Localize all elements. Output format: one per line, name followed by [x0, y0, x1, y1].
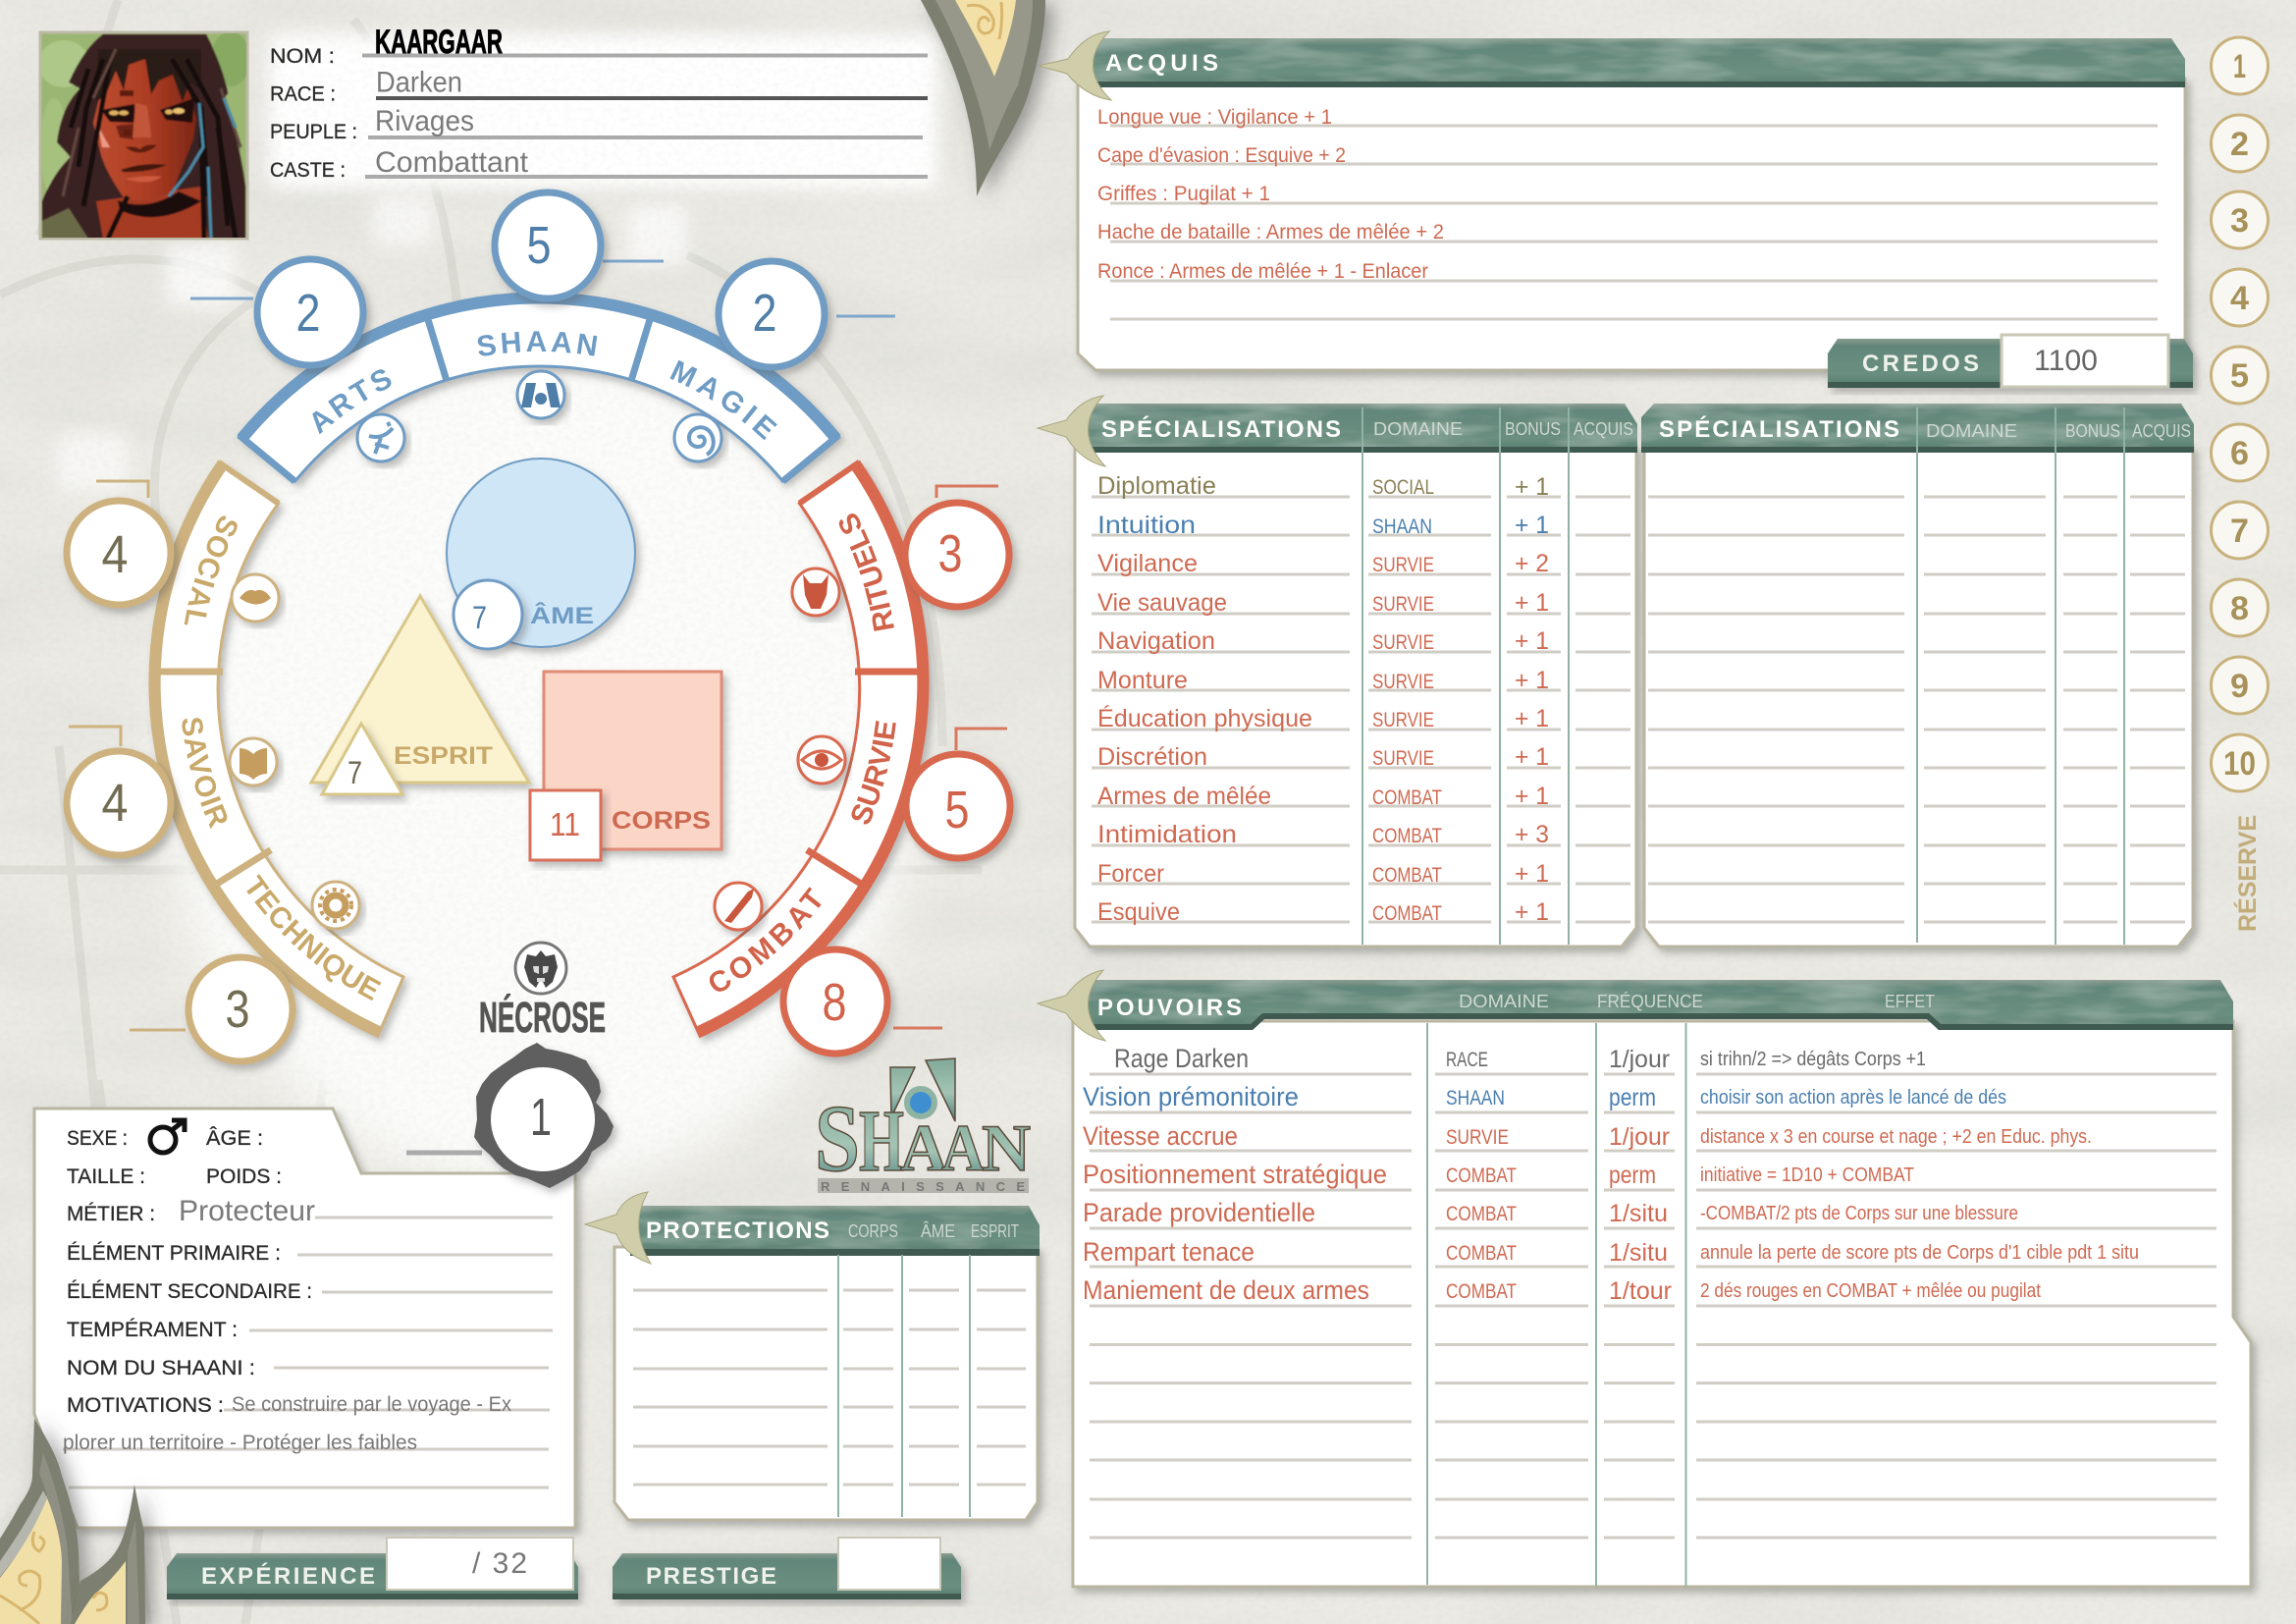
row: Armes de mêlée: + 1 [1515, 783, 1549, 810]
row: Vie sauvage: + 1 [1515, 589, 1549, 617]
row: Forcer: Forcer [1097, 860, 1164, 888]
row: Rage Darken [1114, 1044, 1926, 1073]
reserve tabs 1 to 10: 9 [2230, 668, 2249, 705]
box: credos [1828, 335, 2193, 388]
panel: identity: MOTIVATIONS : [67, 1394, 224, 1417]
panel: pouvoirs [1038, 970, 2251, 1587]
row: Maniement de deux armes: 1/tour [1609, 1277, 1672, 1305]
ring: tan arc (Social, Savoir, Technique): SOCIAL [185, 516, 238, 624]
panel: identity: Protecteur [179, 1195, 315, 1227]
row: Parade providentielle: COMBAT [1446, 1203, 1517, 1225]
row: Rage Darken: RACE [1446, 1049, 1488, 1071]
row: Vitesse accrue: Vitesse accrue [1083, 1121, 1238, 1151]
row: Rempart tenace [1083, 1237, 2139, 1267]
row: Diplomatie: SOCIAL [1372, 476, 1434, 499]
row: Maniement de deux armes: 2 dés rouges en COMBAT + mêlée ou pugilat [1700, 1280, 2041, 1302]
panel: protections: ESPRIT [971, 1221, 1019, 1241]
ornament: top blade [921, 0, 1045, 196]
row: Parade providentielle [1083, 1198, 2018, 1227]
panel: spécialisations left: SPÉCIALISATIONS [1101, 415, 1341, 443]
row: Armes de mêlée: Armes de mêlée [1097, 783, 1271, 810]
reserve tabs 1 to 10: 4 [2230, 280, 2249, 317]
identity fields: NOM : [270, 45, 335, 68]
panel: spécialisations left [1038, 396, 1637, 947]
identity fields [270, 24, 928, 182]
score circles: tan: 4 [102, 774, 128, 833]
attribute: Âme: ÂME [530, 602, 594, 629]
logo: Shaan Renaissance: N [982, 1110, 1031, 1185]
row: Monture [1097, 667, 1549, 694]
identity fields: RACE : [270, 82, 336, 106]
ring: red arc (Rituels, Survie, Combat): RITUELS [838, 514, 894, 631]
row: Diplomatie [1097, 472, 1549, 501]
box: prestige [613, 1538, 961, 1599]
box: expérience [167, 1538, 578, 1599]
row: Esquive [1097, 898, 1549, 926]
attribute: Esprit [311, 596, 529, 794]
reserve tabs 1 to 10: 2 [2230, 126, 2249, 163]
panel: pouvoirs: EFFET [1885, 992, 1935, 1011]
row: Maniement de deux armes: Maniement de deux armes [1083, 1275, 1369, 1305]
row: Intuition: SHAAN [1372, 515, 1432, 538]
small domain icons: blue [357, 371, 721, 461]
row: Positionnement stratégique [1083, 1160, 1914, 1189]
logo: Shaan Renaissance: A [900, 1110, 947, 1185]
attribute: Corps: CORPS [612, 807, 711, 835]
score circles: red: 5 [944, 781, 970, 839]
row: Armes de mêlée: COMBAT [1372, 786, 1442, 809]
row: Vigilance [1097, 550, 1549, 577]
row: Vigilance: SURVIE [1372, 554, 1434, 576]
row: Rempart tenace: 1/situ [1609, 1239, 1668, 1267]
row: Rempart tenace: Rempart tenace [1083, 1237, 1255, 1267]
attribute: Esprit: 7 [347, 755, 362, 790]
box: credos: 1100 [2034, 345, 2098, 377]
small domain icons: tan [230, 574, 359, 929]
score circles: red: 8 [823, 973, 846, 1032]
box: prestige: PRESTIGE [646, 1563, 776, 1590]
ring: blue arc (Arts, Shaan, Magie): MAGIE [669, 359, 777, 440]
panel: identity: Se construire par le voyage - Ex [232, 1393, 511, 1416]
icon: male symbol [150, 1120, 185, 1153]
row: Vitesse accrue [1083, 1121, 2092, 1151]
attribute: Âme: 7 [472, 600, 487, 635]
score circles: red [783, 503, 1010, 1054]
row: Vision prémonitoire: SHAAN [1446, 1087, 1505, 1110]
row: Intuition: + 1 [1515, 512, 1549, 539]
panel: spécialisations right: BONUS [2065, 421, 2120, 441]
row: Intuition: Intuition [1097, 512, 1196, 539]
row: Rempart tenace: COMBAT [1446, 1242, 1517, 1265]
logo: Shaan Renaissance: S [815, 1086, 860, 1192]
row: Navigation [1097, 627, 1549, 655]
ornament: bottom-left blades [0, 1419, 145, 1624]
row: Armes de mêlée [1097, 783, 1549, 810]
panel: identity [34, 1109, 575, 1528]
row: Esquive: COMBAT [1372, 902, 1442, 925]
row: Maniement de deux armes: COMBAT [1446, 1280, 1517, 1303]
identity fields: Combattant [375, 146, 529, 179]
row: Vitesse accrue: distance x 3 en course et nage ; +2 en Educ. phys. [1700, 1126, 2092, 1148]
heading: Nécrose: NÉCROSE [479, 993, 606, 1042]
row: Intuition [1097, 512, 1549, 539]
panel: spécialisations left: BONUS [1505, 419, 1561, 439]
small domain icons: red [715, 568, 845, 930]
identity fields: KAARGAAR [375, 24, 503, 61]
score circles: tan: 3 [226, 980, 249, 1039]
score circles: blue: 5 [526, 216, 552, 275]
row: Forcer: + 1 [1515, 860, 1549, 888]
row: Vision prémonitoire: perm [1609, 1084, 1656, 1111]
reserve tabs 1 to 10: 3 [2230, 202, 2249, 240]
panel: acquis: Griffes : Pugilat + 1 [1097, 183, 1270, 205]
reserve tabs 1 to 10: 10 [2223, 745, 2256, 783]
portrait [38, 31, 250, 239]
row: Discrétion: SURVIE [1372, 747, 1434, 770]
ring: tan arc (Social, Savoir, Technique) [148, 460, 412, 1045]
score circles: blue: 2 [752, 284, 777, 343]
row: Vitesse accrue: 1/jour [1609, 1123, 1670, 1151]
row: Rempart tenace: annule la perte de score pts de Corps d'1 cible pdt 1 situ [1700, 1242, 2139, 1264]
panel: spécialisations right: SPÉCIALISATIONS [1659, 415, 1899, 443]
reserve tabs 1 to 10: 1 [2233, 48, 2246, 85]
row: Éducation physique: Éducation physique [1097, 704, 1312, 732]
panel: spécialisations right [1641, 404, 2194, 947]
ring: red arc (Rituels, Survie, Combat): SURVIE [852, 721, 896, 825]
panel: pouvoirs: DOMAINE [1459, 992, 1549, 1011]
panel: protections [585, 1192, 1040, 1520]
ring: red arc (Rituels, Survie, Combat) [671, 460, 936, 1045]
ring: tan arc (Social, Savoir, Technique): TECHNIQUE [246, 874, 381, 1001]
row: Éducation physique: SURVIE [1372, 709, 1434, 731]
panel: acquis: Hache de bataille : Armes de mêlée + 2 [1097, 221, 1444, 244]
row: Parade providentielle: 1/situ [1609, 1200, 1668, 1227]
row: Parade providentielle: Parade providentielle [1083, 1198, 1315, 1227]
panel: identity: ÉLÉMENT PRIMAIRE : [67, 1242, 281, 1265]
row: Diplomatie: Diplomatie [1097, 472, 1216, 500]
reserve tabs 1 to 10: 8 [2230, 590, 2249, 627]
panel: protections: CORPS [848, 1221, 898, 1241]
reserve tabs 1 to 10: 5 [2230, 357, 2249, 395]
panel: identity: plorer un territoire - Protéger les faibles [63, 1432, 417, 1454]
row: Intimidation: COMBAT [1372, 825, 1442, 847]
row: Vitesse accrue: SURVIE [1446, 1126, 1509, 1149]
logo: Shaan Renaissance: A [941, 1110, 985, 1185]
logo: Shaan Renaissance [815, 1058, 1031, 1194]
identity fields: PEUPLE : [270, 121, 357, 143]
identity fields: Rivages [375, 105, 474, 137]
panel: identity: POIDS : [206, 1165, 282, 1188]
row: Positionnement stratégique: Positionnement stratégique [1083, 1160, 1387, 1189]
row: Monture: + 1 [1515, 667, 1549, 694]
panel: spécialisations right: ACQUIS [2132, 421, 2191, 441]
ring: blue arc (Arts, Shaan, Magie): ARTS [312, 369, 391, 434]
row: Monture: Monture [1097, 667, 1188, 694]
panel: acquis: ACQUIS [1105, 50, 1218, 77]
panel: identity: ÂGE : [206, 1127, 263, 1150]
panel: acquis: Cape d'évasion : Esquive + 2 [1097, 144, 1346, 167]
panel: spécialisations right: DOMAINE [1926, 421, 2017, 441]
logo: Shaan Renaissance: RENAISSANCE [821, 1179, 1025, 1194]
ring: blue arc (Arts, Shaan, Magie) [237, 293, 846, 491]
row: Positionnement stratégique: COMBAT [1446, 1164, 1517, 1187]
reserve tabs 1 to 10: 7 [2230, 513, 2249, 550]
panel: acquis: Ronce : Armes de mêlée + 1 - Enlacer [1097, 260, 1428, 283]
row: Esquive: + 1 [1515, 898, 1549, 926]
reserve tabs 1 to 10 [2211, 37, 2268, 791]
row: Parade providentielle: -COMBAT/2 pts de Corps sur une blessure [1700, 1203, 2018, 1224]
row: Vision prémonitoire: Vision prémonitoire [1083, 1082, 1299, 1111]
panel: identity: TAILLE : [67, 1165, 145, 1188]
Nécrose score [474, 1043, 614, 1188]
row: Forcer [1097, 860, 1549, 888]
row: Navigation: SURVIE [1372, 631, 1434, 654]
panel: acquis [1039, 31, 2185, 370]
icon: Nécrose [515, 943, 566, 994]
attribute: Âme [447, 459, 635, 649]
row: Intimidation [1097, 821, 1549, 848]
attribute: Corps: 11 [550, 806, 580, 842]
row: Éducation physique [1097, 704, 1549, 732]
score circles: tan [67, 501, 293, 1061]
ring: blue arc (Arts, Shaan, Magie): SHAAN [477, 331, 597, 356]
score circles: red: 3 [938, 524, 962, 583]
reserve tabs 1 to 10: 6 [2230, 435, 2249, 472]
row: Maniement de deux armes [1083, 1275, 2041, 1305]
ring: tan arc (Social, Savoir, Technique): SAVOIR [182, 718, 228, 829]
row: Intimidation: Intimidation [1097, 821, 1237, 848]
row: Monture: SURVIE [1372, 671, 1434, 693]
row: Vigilance: Vigilance [1097, 550, 1198, 577]
row: Vigilance: + 2 [1515, 550, 1549, 577]
panel: protections: PROTECTIONS [646, 1218, 829, 1244]
logo: Shaan Renaissance: H [859, 1093, 904, 1190]
identity fields: CASTE : [270, 159, 346, 182]
attribute: Corps [530, 672, 721, 860]
panel: pouvoirs: FRÉQUENCE [1597, 992, 1703, 1011]
row: Rage Darken: Rage Darken [1114, 1044, 1249, 1073]
row: Positionnement stratégique: perm [1609, 1162, 1656, 1189]
row: Positionnement stratégique: initiative = 1D10 + COMBAT [1700, 1164, 1914, 1186]
panel: pouvoirs: POUVOIRS [1097, 995, 1242, 1021]
row: Discrétion: Discrétion [1097, 743, 1207, 771]
label: réserve: RÉSERVE [2233, 815, 2262, 932]
panel: acquis: Longue vue : Vigilance + 1 [1097, 106, 1332, 129]
row: Vie sauvage [1097, 589, 1549, 617]
row: Discrétion [1097, 743, 1549, 771]
connector lines [69, 261, 1007, 1153]
score circles: blue [257, 192, 825, 367]
row: Vision prémonitoire [1083, 1082, 2006, 1111]
panel: protections: ÂME [921, 1221, 955, 1241]
box: expérience: EXPÉRIENCE [201, 1562, 375, 1590]
box: credos: CREDOS [1862, 351, 1979, 377]
row: Discrétion: + 1 [1515, 743, 1549, 771]
row: Diplomatie: + 1 [1515, 473, 1549, 501]
panel: identity: SEXE : [67, 1127, 128, 1150]
row: Esquive: Esquive [1097, 898, 1180, 926]
row: Vie sauvage: Vie sauvage [1097, 589, 1227, 617]
panel: identity: NOM DU SHAANI : [67, 1357, 255, 1380]
panel: identity: TEMPÉRAMENT : [67, 1319, 238, 1341]
panel: spécialisations left: DOMAINE [1373, 419, 1463, 439]
row: Vie sauvage: SURVIE [1372, 593, 1434, 616]
Nécrose score: 1 [530, 1088, 552, 1147]
row: Rage Darken: si trihn/2 => dégâts Corps +1 [1700, 1049, 1926, 1070]
row: Éducation physique: + 1 [1515, 705, 1549, 732]
ring: red arc (Rituels, Survie, Combat): COMBAT [709, 887, 822, 992]
score circles: blue: 2 [296, 284, 320, 343]
panel: identity: MÉTIER : [67, 1203, 155, 1225]
row: Rage Darken: 1/jour [1609, 1046, 1670, 1073]
box: expérience: / 32 [472, 1547, 527, 1580]
panel: identity: ÉLÉMENT SECONDAIRE : [67, 1280, 312, 1303]
panel: spécialisations left: ACQUIS [1574, 419, 1633, 439]
score circles: tan: 4 [102, 525, 128, 584]
row: Intimidation: + 3 [1515, 821, 1549, 848]
row: Forcer: COMBAT [1372, 864, 1442, 887]
identity fields: Darken [376, 67, 462, 98]
attribute: Esprit: ESPRIT [394, 742, 493, 770]
row: Navigation: Navigation [1097, 627, 1215, 655]
row: Vision prémonitoire: choisir son action après le lancé de dés [1700, 1087, 2006, 1109]
row: Navigation: + 1 [1515, 627, 1549, 655]
